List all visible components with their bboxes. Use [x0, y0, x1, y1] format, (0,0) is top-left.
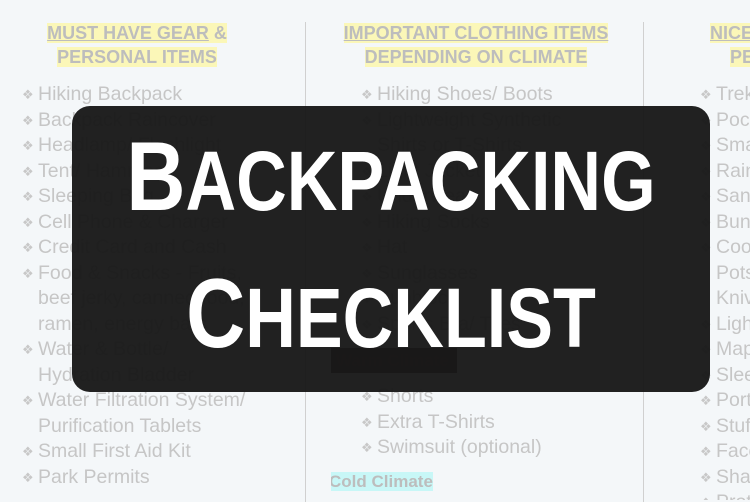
list: clothing: ❖	[361, 291, 373, 306]
list: gear: ❖	[22, 87, 34, 102]
list: nice to have: ❖	[700, 189, 712, 204]
list: gear: Cell Phone & Charger	[38, 210, 228, 232]
list: gear: Headlamp/ Flashlight	[38, 134, 221, 156]
list: nice to have	[700, 83, 750, 500]
column: must have gear	[22, 23, 246, 488]
list: clothing: Sports Bra/ Tees	[377, 312, 521, 334]
list: gear: Purification Tablets	[38, 414, 201, 436]
title line 1: BACKPACKING	[126, 121, 656, 231]
list: gear: ❖	[22, 240, 34, 255]
list: clothing: Swimsuit (optional)	[377, 436, 542, 458]
list: gear: beef jerky, canned food,	[38, 287, 245, 309]
title line 2: CHECKLIST	[186, 258, 596, 368]
list: clothing: ❖	[361, 440, 373, 455]
list: nice to have: ❖	[700, 164, 712, 178]
list: gear: ramen, energy bars	[38, 312, 207, 334]
list: gear: Backpack Raincover	[38, 108, 216, 130]
heading: clothing	[344, 23, 608, 67]
list: nice to have: ❖	[700, 214, 712, 230]
list: nice to have: ❖	[700, 470, 712, 484]
list: clothing: Light Jacket	[377, 160, 481, 182]
list: clothing: ❖	[361, 389, 373, 404]
list: gear: Hydration Bladder	[38, 364, 194, 386]
list: clothing: Underwear	[377, 185, 472, 207]
list: gear: ❖	[22, 393, 34, 408]
list: clothing: Sunblock	[377, 287, 457, 309]
list: gear	[22, 83, 246, 488]
list: gear: ❖	[22, 266, 34, 280]
list: clothing: Extra T-Shirts	[377, 410, 495, 432]
list: clothing	[331, 83, 561, 458]
list: gear: ❖	[22, 112, 34, 128]
column: nice to have	[700, 23, 750, 500]
list: nice to have: ❖	[700, 342, 712, 357]
list: gear: Water Filtration System/	[38, 389, 245, 411]
heading: must have gear: PERSONAL ITEMS	[57, 47, 217, 67]
list: clothing: Lightweight Synthetic	[377, 108, 561, 130]
list: nice to have: ❖	[700, 112, 712, 128]
list: gear: Water & Bottle/	[38, 338, 168, 360]
list: gear: ❖	[22, 470, 34, 484]
list: gear: Hiking Backpack	[38, 83, 182, 105]
list: gear: ❖	[22, 214, 34, 230]
list: clothing: ❖	[361, 112, 373, 128]
list: clothing: Sunglasses	[377, 262, 478, 284]
list: clothing: ❖	[361, 414, 373, 430]
list: clothing: Hiking Shoes/ Boots	[377, 83, 553, 105]
list: nice to have: ❖	[700, 368, 712, 382]
list: clothing: ❖	[361, 189, 373, 204]
list: gear: Tent/ Hammock	[38, 160, 173, 182]
list: nice to have: ❖	[700, 418, 712, 434]
heading: must have gear: MUST HAVE GEAR &	[47, 23, 227, 43]
list: nice to have: ❖	[700, 316, 712, 332]
column: clothing	[331, 23, 608, 491]
list: clothing: ❖	[361, 164, 373, 178]
list: gear: ❖	[22, 342, 34, 357]
list: gear: ❖	[22, 444, 34, 459]
list: clothing: Shirts or T-Shirts	[377, 134, 522, 156]
title box	[72, 106, 710, 392]
list: clothing: Shorts	[377, 385, 433, 407]
heading: must have gear	[47, 23, 227, 67]
list: clothing: ❖	[361, 214, 373, 230]
list: gear: Sleeping Bag	[38, 185, 154, 207]
list: nice to have: ❖	[700, 138, 712, 153]
heading: clothing: DEPENDING ON CLIMATE	[365, 47, 587, 67]
list: clothing: ❖	[361, 266, 373, 280]
list: clothing: Warm Climate	[336, 351, 449, 370]
list: gear: ❖	[22, 189, 34, 204]
list: nice to have: ❖	[700, 393, 712, 408]
list: gear: Small First Aid Kit	[38, 440, 191, 462]
list: gear: Food & Snacks - Fruits,	[38, 262, 242, 284]
list: nice to have: ❖	[700, 87, 712, 102]
list: gear: Credit Card and Cash	[38, 236, 227, 258]
list: gear: ❖	[22, 138, 34, 153]
list: gear: Park Permits	[38, 466, 150, 488]
list: clothing: ❖	[361, 316, 373, 332]
list: nice to have: ❖	[700, 444, 712, 459]
label: cold climate: Cold Climate	[331, 472, 433, 490]
list: gear: ❖	[22, 164, 34, 178]
heading: nice to have	[710, 23, 750, 67]
list: clothing: Hiking Socks	[377, 210, 490, 232]
heading: clothing: IMPORTANT CLOTHING ITEMS	[344, 23, 608, 43]
list: nice to have: ❖	[700, 240, 712, 255]
list: clothing: Hat	[377, 236, 407, 258]
list: clothing: ❖	[361, 240, 373, 255]
list: clothing: ❖	[361, 87, 373, 102]
